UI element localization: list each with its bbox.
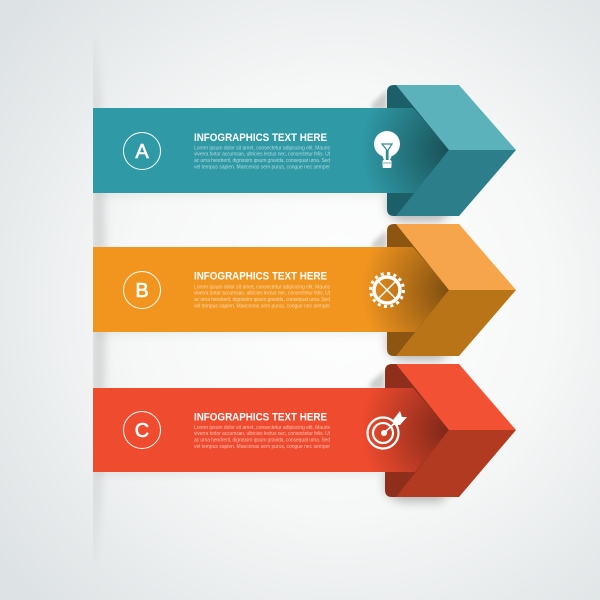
- text block C: Lorem ipsum dolor sit amet, consectetur adipiscing elit. Mauris: [194, 425, 330, 431]
- text block A: vel tempus sapien. Maecenas sem purus, congue nec semper: [194, 164, 330, 170]
- text block B: INFOGRAPHICS TEXT HERE: [194, 270, 327, 282]
- arrow B upper face: [396, 224, 516, 290]
- text block B: viverra tortor accumsan, ultricies lectus nec, consectetur felis. Ut: [194, 290, 331, 296]
- icon: target with dart: [368, 411, 407, 448]
- text block B: [194, 270, 331, 310]
- arrow B shadow: [97, 230, 470, 361]
- arrow C shadow: [97, 370, 470, 502]
- badge C: C: [135, 420, 149, 442]
- arrow A lower face: [396, 150, 516, 216]
- arrow B: [93, 224, 516, 361]
- text block C: ac urna hendrerit, dignissim ipsum gravida, consequat urna. Sed: [194, 438, 330, 444]
- arrow B lower face: [396, 290, 516, 356]
- text block B: ac urna hendrerit, dignissim ipsum gravida, consequat urna. Sed: [194, 297, 330, 303]
- text block C: viverra tortor accumsan, ultricies lectus nec, consectetur felis. Ut: [194, 431, 331, 437]
- left edge shadow: [93, 30, 104, 570]
- badge B: [124, 272, 160, 308]
- arrow C band: [93, 388, 449, 472]
- badge B: B: [135, 280, 149, 302]
- arrow A band: [93, 108, 449, 193]
- arrow C upper face: [396, 364, 516, 430]
- text block A: ac urna hendrerit, dignissim ipsum gravida, consequat urna. Sed: [194, 158, 330, 164]
- text block C: [194, 412, 331, 450]
- badge A: [124, 132, 160, 170]
- text block B: vel tempus sapien. Maecenas sem purus, congue nec semper: [194, 304, 330, 310]
- arrow B back fold: [387, 224, 449, 356]
- badge C: [124, 412, 160, 448]
- text block C: vel tempus sapien. Maecenas sem purus, congue nec semper: [194, 444, 330, 450]
- text block A: [194, 132, 331, 170]
- text block C: INFOGRAPHICS TEXT HERE: [194, 412, 327, 424]
- badge A: A: [135, 141, 149, 163]
- arrow C: [93, 364, 516, 502]
- arrow A: [93, 85, 516, 222]
- text block A: INFOGRAPHICS TEXT HERE: [194, 132, 327, 144]
- icon: gear: [370, 274, 404, 306]
- arrow C back fold: [385, 364, 449, 497]
- arrow A shadow: [97, 90, 470, 222]
- text block A: viverra tortor accumsan, ultricies lectus nec, consectetur felis. Ut: [194, 152, 331, 158]
- icon: light bulb: [374, 131, 400, 168]
- arrow A back fold: [387, 85, 449, 216]
- arrow B band: [93, 247, 449, 332]
- text block A: Lorem ipsum dolor sit amet, consectetur adipiscing elit. Mauris: [194, 146, 330, 152]
- arrow C lower face: [396, 430, 516, 497]
- text block B: Lorem ipsum dolor sit amet, consectetur adipiscing elit. Mauris: [194, 284, 330, 290]
- arrow A upper face: [396, 85, 516, 150]
